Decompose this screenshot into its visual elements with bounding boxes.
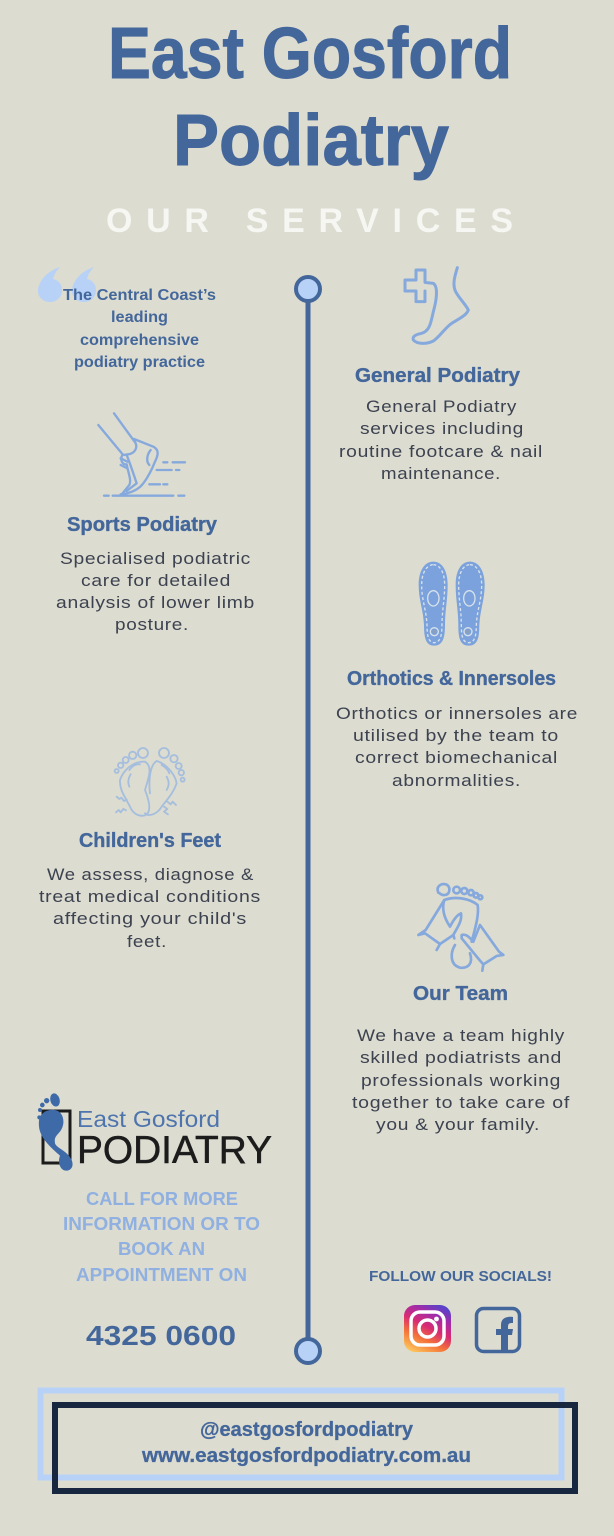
description <box>39 866 261 951</box>
logo foot <box>37 1092 73 1171</box>
navy frame <box>55 1405 575 1491</box>
description <box>336 705 578 790</box>
description: you & your family. <box>376 1116 540 1134</box>
description: General Podiatry <box>366 398 517 416</box>
call to action: CALL FOR MORE <box>86 1189 238 1209</box>
description: care for detailed <box>81 572 231 590</box>
heading: Orthotics & Innersoles <box>347 668 556 690</box>
quote text: The Central Coast’s <box>63 287 216 304</box>
call to action <box>63 1189 260 1285</box>
icon: instagram <box>404 1305 451 1352</box>
description: We have a team highly <box>357 1027 565 1045</box>
title <box>108 14 512 181</box>
panel: sports podiatry <box>56 413 255 634</box>
quote text: podiatry practice <box>74 354 205 371</box>
heading: General Podiatry <box>355 365 521 387</box>
pale frame <box>40 1390 562 1478</box>
phone number: 4325 0600 <box>86 1320 236 1351</box>
description: together to take care of <box>352 1094 570 1112</box>
quote text <box>63 287 216 371</box>
description: Orthotics or innersoles are <box>336 705 578 723</box>
description: affecting your child's <box>53 910 247 928</box>
quote text: comprehensive <box>80 332 199 349</box>
quote <box>38 267 216 371</box>
description: We assess, diagnose & <box>47 866 254 884</box>
timeline <box>296 277 320 1363</box>
description <box>56 550 255 634</box>
contact box <box>40 1390 575 1491</box>
description: correct biomechanical <box>355 749 558 767</box>
logo frame <box>43 1111 70 1163</box>
description: utilised by the team to <box>353 727 559 745</box>
socials heading: FOLLOW OUR SOCIALS! <box>369 1269 552 1285</box>
icon: hands holding foot <box>418 884 503 971</box>
logo: east gosford podiatry <box>37 1092 272 1172</box>
logo name: East Gosford <box>77 1106 220 1132</box>
description: feet. <box>127 933 167 951</box>
description: abnormalities. <box>392 772 521 790</box>
call to action: INFORMATION OR TO <box>63 1214 260 1234</box>
heading: Sports Podiatry <box>67 514 218 536</box>
website: www.eastgosfordpodiatry.com.au <box>141 1445 471 1467</box>
call to action: BOOK AN <box>118 1239 205 1259</box>
heading: Our Team <box>413 983 508 1005</box>
icon: foot with cross <box>405 268 468 343</box>
title: East Gosford <box>108 14 512 94</box>
title: Podiatry <box>173 101 449 181</box>
logo wordmark: PODIATRY <box>77 1129 272 1172</box>
description: analysis of lower limb <box>56 594 255 612</box>
description: posture. <box>115 616 189 634</box>
heading: Children's Feet <box>79 830 221 852</box>
icon: children's feet <box>115 748 185 816</box>
description: services including <box>360 420 524 438</box>
icon: insoles <box>419 562 485 646</box>
panel: our team <box>352 884 570 1134</box>
icon: quotation marks <box>38 267 96 302</box>
description: routine footcare & nail <box>339 443 543 461</box>
icon: facebook <box>476 1308 520 1352</box>
subtitle: our services: OUR SERVICES <box>106 202 513 240</box>
description: skilled podiatrists and <box>360 1049 562 1067</box>
icon: running shoe <box>98 413 185 496</box>
description: treat medical conditions <box>39 888 261 906</box>
panel: children's feet <box>39 748 261 951</box>
social handle: @eastgosfordpodiatry <box>200 1419 414 1441</box>
panel: general podiatry <box>339 268 543 483</box>
panel: orthotics and innersoles <box>336 562 578 790</box>
quote text: leading <box>111 309 168 326</box>
description: professionals working <box>361 1072 561 1090</box>
description <box>352 1027 570 1134</box>
description <box>339 398 543 483</box>
description: maintenance. <box>381 465 501 483</box>
call to action: APPOINTMENT ON <box>76 1265 247 1285</box>
description: Specialised podiatric <box>60 550 251 568</box>
